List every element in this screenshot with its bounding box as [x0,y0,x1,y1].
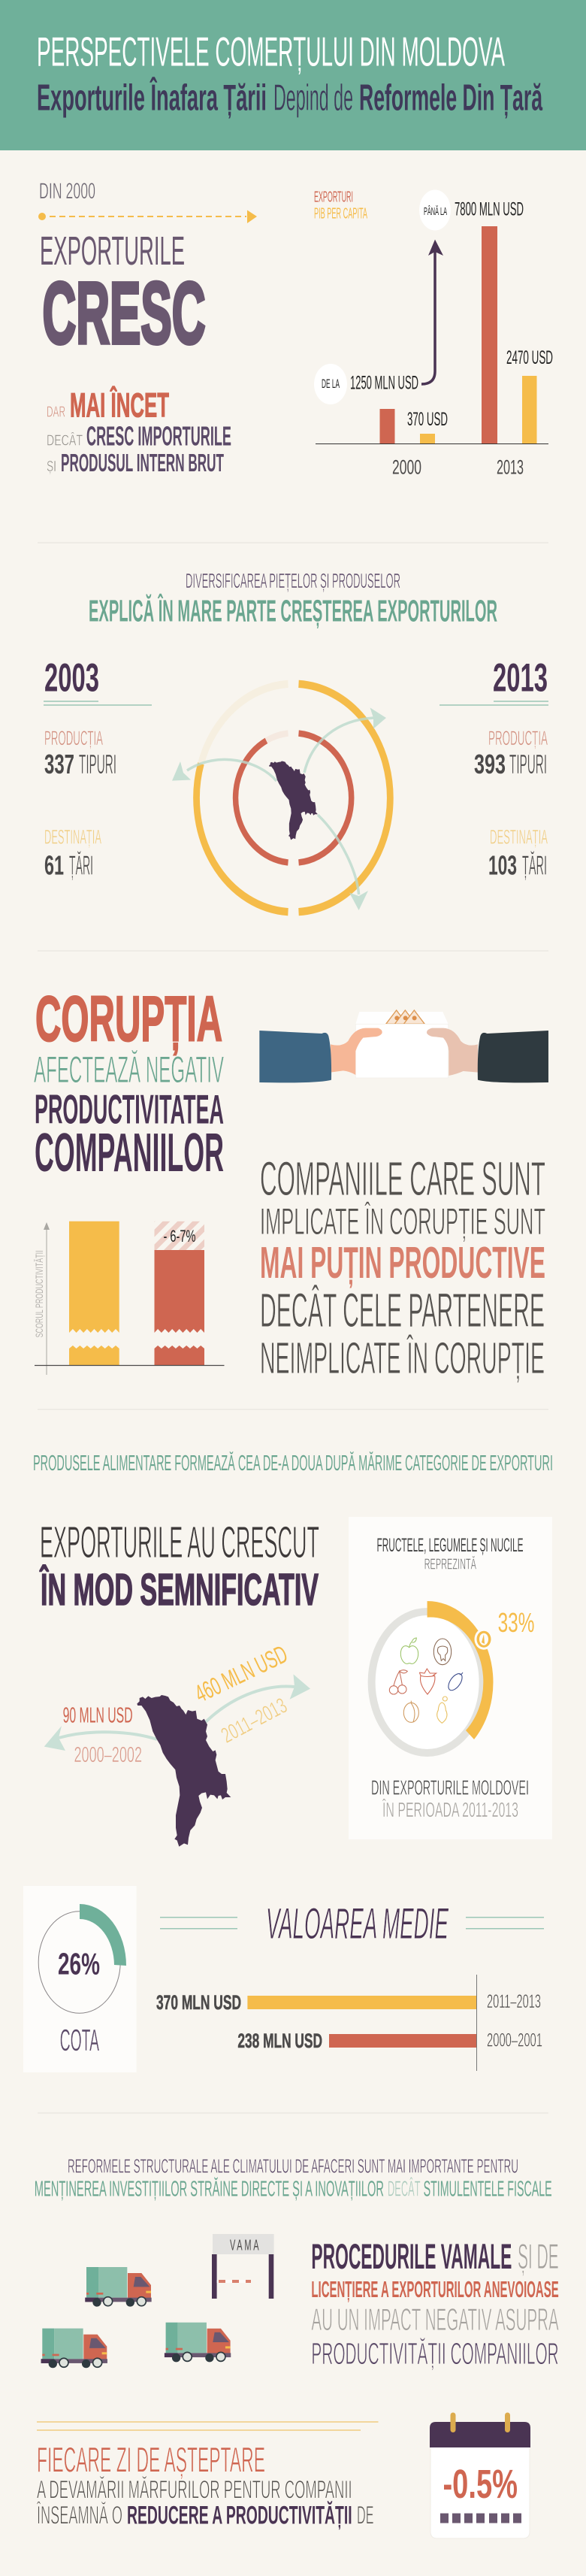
bar chart: average value: 2011–2013 [487,1991,541,2012]
icon: truck [85,2267,152,2307]
bar chart: exports and GDP per capita: 370 USD [407,409,448,430]
legend [314,189,367,222]
icon: truck [165,2323,231,2362]
panel: 2003 stats [44,656,152,881]
callout: pana la [419,189,524,230]
panel: share card: COTA [60,2023,99,2057]
arrow: growth [421,240,443,384]
chart: map with food export flows: 2000–2002 [74,1743,142,1767]
chart: map with food export flows: 90 MLN USD [63,1703,133,1727]
icon: calendar: -0.5% [443,2462,518,2507]
heading: diversification [89,569,497,628]
panel: 2003 stats: 2003 [44,656,99,701]
icon: walnut [433,1639,452,1665]
heading: exports grew significantly: ÎN MOD SEMNIFICATIV [39,1564,319,1615]
icon: strawberry [419,1669,436,1694]
text block: every day of waiting: DE [357,2501,374,2529]
donut: 33% [372,1601,493,1753]
bar chart: exports and GDP per capita: PIB PER CAPITA [314,205,367,222]
legend: EXPORTURI [314,189,353,206]
panel: fruits share card: 33% [498,1607,534,1638]
text block: mai incet: CRESC IMPORTURILE [86,421,231,452]
panel: 2013 stats [440,656,548,881]
header banner [0,0,586,150]
callout: pana la: 7800 MLN USD [455,199,524,220]
map: Moldova [137,1695,231,1847]
icon: customs gate: VAMA [230,2237,261,2254]
text block: mai incet: DECÂT [47,432,83,450]
text block: mai incet: MAI ÎNCET [70,386,169,424]
text block: every day of waiting: ÎNSEAMNĂ O [36,2501,122,2529]
icon: hands passing envelope [259,1010,548,1082]
bar chart: exports and GDP per capita: 2000 [392,456,421,478]
text block: mai incet [47,386,231,477]
text block: every day of waiting [36,2422,379,2529]
text block: customs procedures [311,2237,559,2371]
chart: map with food export flows: 2011–2013 [217,1694,291,1748]
subtitle: Depind de [273,78,353,119]
heading: coruptia [34,983,224,1183]
heading: exporturile cresc: EXPORTURILE [40,229,185,274]
callout: de la [314,364,418,404]
heading: exports grew significantly [39,1518,319,1615]
text: ȚĂRI [522,850,547,881]
callout: de la: 1250 MLN USD [350,373,418,394]
panel: fruits share card [349,1517,552,1839]
text: AFECTEAZĂ NEGATIV [34,1049,224,1091]
heading: structural reforms [35,2154,552,2202]
icon: truck [41,2329,107,2368]
panel: share card [23,1886,137,2072]
chart: map with food export flows: 460 MLN USD [190,1639,291,1708]
text block: mai incet: DAR [47,404,65,420]
bar chart: exports and GDP per capita [314,189,553,478]
inner ring: products [236,734,352,862]
bar chart: average value: 2000–2001 [487,2030,542,2051]
icon: apple [400,1638,418,1663]
panel: 2003 stats: 61 [44,850,64,881]
callout: pana la: PÂNĂ LA [424,205,447,218]
icon: customs gate [212,2234,274,2299]
heading: exporturile cresc [40,229,206,362]
icon: pear [437,1697,447,1723]
icon: cherries [389,1670,407,1694]
bar chart: exports and GDP per capita: 2013 [497,456,524,478]
text block: mai incet: ȘI [47,459,56,475]
callout: de la: DE LA [322,377,340,391]
panel: 2003 stats: PRODUCȚIA [44,727,103,749]
panel: share card: 26% [58,1947,100,1981]
panel: 2003 stats: 337 [44,749,74,779]
bar chart: average value [156,1975,542,2071]
panel: 2013 stats: 103 [488,850,517,881]
bar chart: average value: 238 MLN USD [237,2030,322,2052]
text: PRODUCTIVITATEA [35,1086,224,1133]
panel: 2003 stats: DESTINAȚIA [44,825,101,848]
text block: every day of waiting: FIECARE ZI DE AȘTEPTARE [37,2440,265,2479]
chart: concentric rings with map [172,684,390,912]
panel: 2013 stats: 393 [474,749,506,779]
arrows: flows [44,1674,310,1751]
text block: every day of waiting: REDUCERE A PRODUCTIVITĂȚII [127,2501,352,2529]
bar chart: productivity score [33,1221,224,1375]
bar chart: average value: 370 MLN USD [156,1991,241,2014]
subtitle: Exporturile Înafara Țării [37,77,267,119]
icons: fruits [389,1638,465,1723]
heading: din 2000: DIN 2000 [39,179,95,204]
panel: 2013 stats: 2013 [493,656,548,701]
panel: fruits share card: REPREZINTĂ [424,1556,476,1573]
bar chart: productivity score: SCORUL PRODUCTIVITĂȚII [33,1250,45,1337]
outer ring: destinations [197,684,390,912]
panel: 2003 stats: ȚĂRI [69,850,93,881]
text: COMPANIILOR [35,1123,224,1183]
bar chart: productivity score: - 6-7% [164,1227,195,1246]
arrows: export flows [172,707,386,910]
chart: map with food export flows [44,1639,310,1847]
heading: structural reforms: DECÂT [388,2177,421,2202]
text block: mai incet: PRODUSUL INTERN BRUT [61,449,224,477]
arrow: dashed timeline [38,210,257,223]
icon: calendar [430,2413,530,2538]
panel: 2003 stats: TIPURI [79,749,116,779]
map: Moldova [269,761,318,840]
heading: coruptia: CORUPȚIA [35,983,222,1055]
text block: less productive companies [260,1152,545,1383]
icon: peach [403,1701,418,1722]
icon: plum [446,1671,465,1693]
heading: exporturile cresc: CRESC [42,265,206,362]
